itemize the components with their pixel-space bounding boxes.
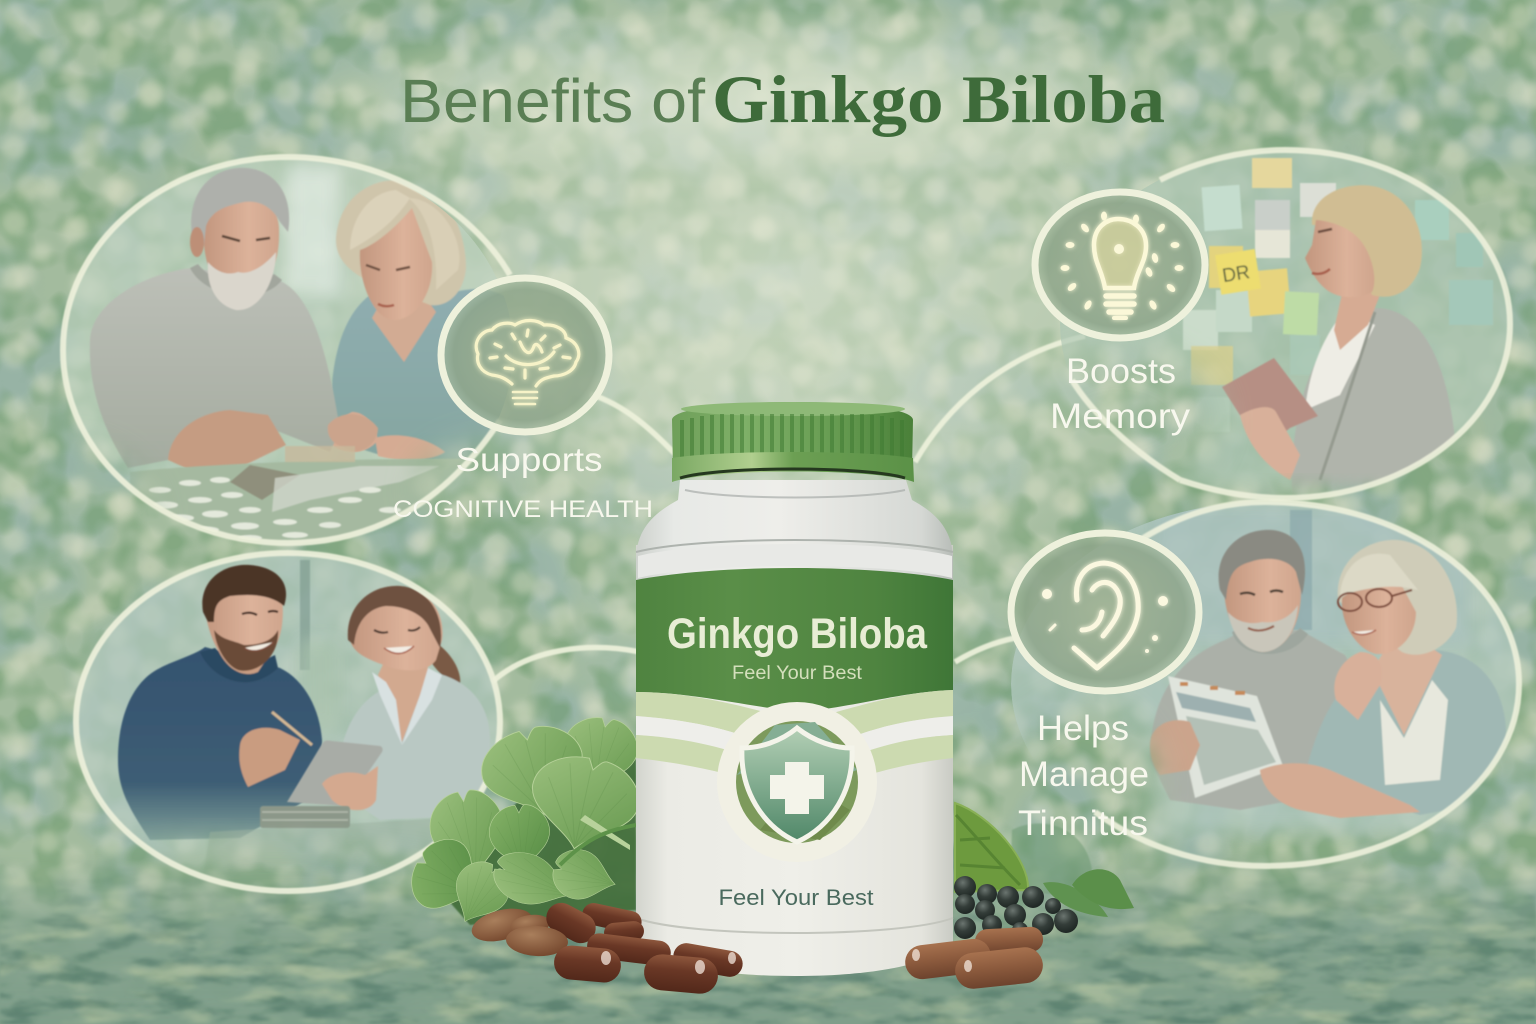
panel: cognitive health scene	[63, 157, 530, 560]
text: boosts memory	[1050, 352, 1191, 436]
illustration: yellow note with writing: DR	[1221, 262, 1251, 287]
illustration: supplement bottle	[636, 402, 953, 976]
illustration: woman with notebook	[1222, 185, 1456, 498]
panel: memory scene	[1060, 150, 1510, 498]
icon: brain	[441, 278, 609, 432]
connector lines	[492, 336, 1085, 682]
illustration: man reading	[1150, 529, 1347, 810]
bottle base groove	[636, 918, 953, 933]
bottle body	[636, 545, 953, 976]
illustration: sticky notes	[1183, 158, 1493, 432]
illustration: berries	[954, 876, 1078, 939]
illustration: woman with tablet	[336, 586, 490, 820]
text: helps manage tinnitus	[1018, 709, 1149, 843]
illustration: newspaper	[1150, 676, 1283, 798]
illustration: woman with glasses	[1260, 540, 1506, 818]
text: boosts memory: Boosts	[1066, 352, 1176, 391]
title: Benefits of	[400, 67, 706, 135]
illustration: man in grey sweater	[90, 168, 378, 472]
title: Ginkgo Biloba	[712, 61, 1165, 137]
text: bottle brand: Ginkgo Biloba	[667, 610, 928, 658]
icon: ear	[1011, 533, 1199, 691]
text: bottle tagline top: Feel Your Best	[732, 663, 863, 684]
text: cognitive health: COGNITIVE HEALTH	[393, 496, 653, 523]
illustration: leaves and berries right	[954, 803, 1134, 939]
title	[400, 61, 1165, 137]
text: helps manage tinnitus: Tinnitus	[1018, 804, 1148, 843]
panel: tinnitus scene	[1011, 502, 1519, 866]
illustration: books on table	[210, 805, 432, 853]
illustration: textured leaf	[955, 803, 1028, 892]
text: helps manage tinnitus: Manage	[1019, 755, 1149, 794]
text: helps manage tinnitus: Helps	[1037, 709, 1129, 748]
illustration: tablet	[287, 740, 383, 810]
text: boosts memory: Memory	[1050, 397, 1191, 436]
text: supports: Supports	[456, 441, 602, 478]
icon: shield emblem	[717, 702, 877, 862]
illustration: man in navy hoodie	[118, 565, 322, 840]
illustration: woman in teal top	[332, 180, 500, 460]
panel: focus scene	[76, 553, 500, 900]
illustration: capsules	[468, 898, 1045, 995]
illustration: yellow note with writing	[1215, 249, 1261, 295]
icon: lightbulb	[1035, 192, 1205, 338]
bottle cap	[672, 402, 914, 482]
text: bottle tagline bottom: Feel Your Best	[718, 885, 874, 910]
bottle label	[636, 568, 953, 800]
illustration: puzzle table	[130, 446, 464, 540]
illustration: ginkgo leaves left	[400, 713, 646, 934]
bottle shoulder	[636, 480, 953, 590]
